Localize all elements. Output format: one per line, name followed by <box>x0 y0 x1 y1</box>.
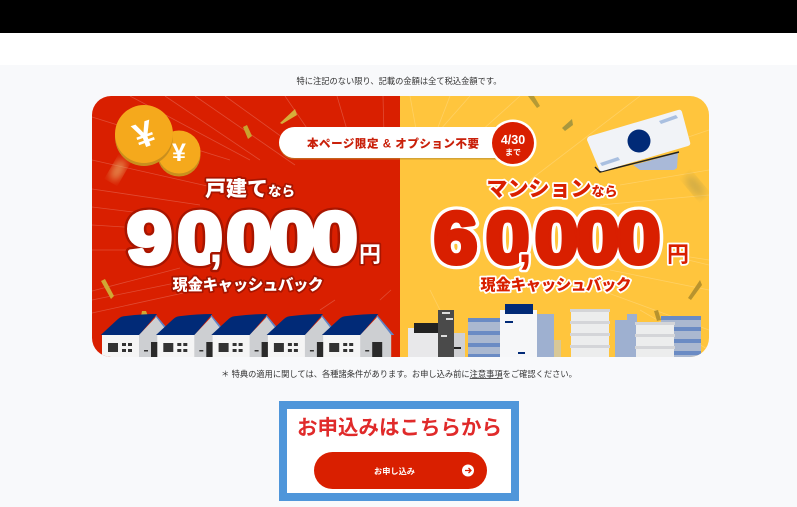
white header strip <box>0 33 797 65</box>
icon: yen coins <box>115 105 200 176</box>
apply button <box>314 452 487 489</box>
CTA heading: お申込みはこちらから <box>297 416 502 440</box>
sunburst rays <box>92 96 709 350</box>
application call-to-action box <box>283 405 515 497</box>
right amount: 60000 <box>434 198 660 278</box>
tax note: 特に注記のない限り、記載の金額は全て税込金額です。 <box>296 76 502 86</box>
right cashback label: 現金キャッシュバック <box>480 276 632 294</box>
condominium buildings <box>408 304 701 358</box>
offer pill text: 本ページ限定 & オプション不要 <box>307 136 480 150</box>
left cashback label: 現金キャッシュバック <box>172 276 324 294</box>
left amount: , <box>209 217 223 273</box>
deadline badge: まで <box>505 148 521 157</box>
deadline badge <box>490 120 536 166</box>
icon: yen coins: ¥ <box>172 139 186 167</box>
left amount: 円 <box>359 242 381 267</box>
left amount: 90000 <box>127 199 357 279</box>
right amount: 円 <box>667 242 689 267</box>
confetti <box>101 96 702 321</box>
panel: condominium yellow background <box>400 96 709 357</box>
deadline badge: 4/30 <box>501 133 525 147</box>
houses row <box>101 314 394 358</box>
left amount: 90000 <box>127 199 357 279</box>
campaign banner <box>92 96 709 358</box>
offer pill <box>279 127 511 160</box>
panel: detached house red background <box>92 96 400 357</box>
right heading: マンションなら <box>486 178 618 201</box>
top black bar <box>0 0 797 33</box>
blurred confetti <box>107 157 129 183</box>
icon: yen coins: ¥ <box>128 112 161 157</box>
icon: banknote <box>587 110 690 172</box>
right amount: , <box>518 217 532 273</box>
apply button: お申し込み <box>374 466 415 476</box>
icon: arrow circle <box>462 464 474 476</box>
left heading: 戸建てなら <box>205 178 295 201</box>
conditions note: ＊ 特典の適用に関しては、各種諸条件があります。お申し込み前に注意事項をご確認ください。 <box>221 369 577 379</box>
right amount: 60000 <box>434 198 660 278</box>
